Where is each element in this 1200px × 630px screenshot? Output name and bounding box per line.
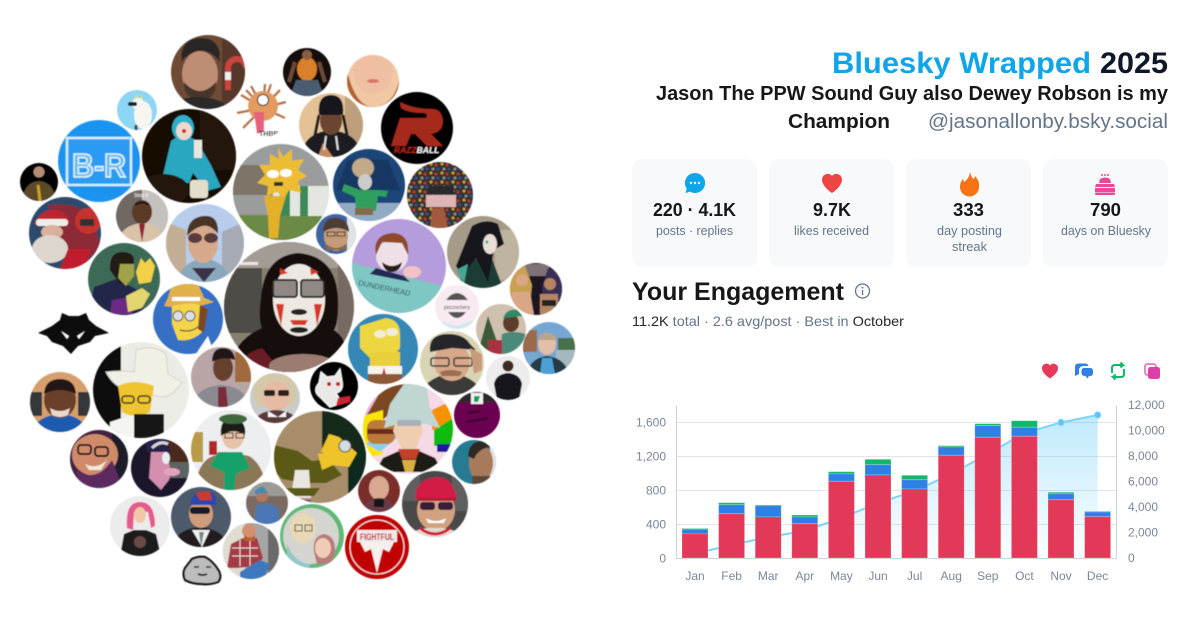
- avatar: Razzball logo: [381, 92, 453, 164]
- right axis labels: 2,000: [1128, 526, 1158, 540]
- avatar bubble cluster: [20, 35, 575, 584]
- month labels: Jan: [685, 569, 705, 583]
- avatar: B-R neon logo: B-R: [72, 147, 126, 184]
- icon: cake: [1095, 174, 1115, 195]
- avatar: yellow sun mascot: [233, 144, 329, 240]
- stat: day posting streak: [937, 200, 1002, 254]
- avatar: wrestler in orange: [283, 48, 331, 96]
- avatar: Gundam pride portrait: [363, 384, 453, 474]
- month labels: Oct: [1015, 569, 1034, 583]
- title: 2025: [1100, 47, 1168, 80]
- avatar: blonde woman with sunglasses: [250, 373, 300, 423]
- icon: heart: [822, 174, 842, 193]
- stacked bars: [682, 421, 1111, 558]
- right axis labels: [1128, 398, 1165, 565]
- bar: Oct: [1011, 421, 1037, 558]
- avatar: hat cartoon: [153, 284, 223, 354]
- bar: May: [828, 472, 854, 558]
- month labels: Mar: [758, 569, 779, 583]
- month labels: Sep: [977, 569, 999, 583]
- panel: days on Bluesky: [1043, 159, 1168, 267]
- avatar: man with blue wall: [452, 440, 496, 484]
- avatar: two wrestling women: [510, 263, 562, 315]
- avatar: man in black cap: [420, 331, 484, 395]
- icon: black wolf logo: [38, 313, 109, 354]
- heading: your engagement: Your Engagement: [632, 278, 845, 306]
- right axis labels: 6,000: [1128, 474, 1158, 488]
- bar: Apr: [792, 515, 818, 558]
- legend icons: [1042, 362, 1160, 380]
- avatar: pezzochery logo: pezzochery: [444, 305, 470, 311]
- avatar: wrestling mask main portrait: [224, 242, 354, 378]
- bar: Jan: [682, 528, 708, 558]
- display name and handle: Jason The PPW Sound Guy also Dewey Robson is my: [656, 83, 1169, 105]
- title: Bluesky Wrapped: [832, 47, 1091, 80]
- avatar: red-haired woman small: [358, 470, 400, 512]
- engagement summary: 11.2K total · 2.6 avg/post · Best in October: [632, 313, 904, 329]
- avatar: smiling man in blue: [30, 372, 90, 432]
- stat: likes received: 9.7K: [813, 200, 851, 220]
- avatar: B-R neon logo: [58, 120, 140, 202]
- display name and handle: @jasonallonby.bsky.social: [928, 111, 1168, 133]
- left axis labels: 1,200: [636, 450, 666, 464]
- avatar: Dunderhead cartoon: [352, 219, 446, 313]
- icon: legend heart: [1042, 364, 1058, 378]
- panel: posting streak: [906, 159, 1031, 267]
- icon: chat bubble: [685, 173, 705, 193]
- chart: monthly engagement: [636, 398, 1165, 583]
- avatar: black cat sticker: [310, 362, 358, 410]
- avatar: black shirt on white: [486, 356, 530, 400]
- icon: legend replies: [1075, 364, 1093, 378]
- stat: days on Bluesky: days on Bluesky: [1061, 223, 1151, 238]
- avatar: man in black beanie: [299, 93, 363, 157]
- avatar: red-haired woman: [347, 46, 399, 107]
- month labels: Aug: [941, 569, 962, 583]
- avatar: Fightful logo: FIGHTFUL: [360, 532, 394, 543]
- right axis labels: 0: [1128, 551, 1135, 565]
- avatar: wrestling crowd: [407, 162, 473, 228]
- avatar: yellow puppet in cowboy hat: [93, 342, 189, 438]
- avatar: Dunderhead cartoon: DUNDERHEAD: [358, 278, 412, 298]
- bar: Nov: [1048, 492, 1074, 558]
- avatar: man in camo: [20, 163, 58, 201]
- stat: likes received: likes received: [794, 223, 869, 238]
- avatar: man in beige suit: [116, 190, 168, 242]
- avatar: illustrated couple: [280, 504, 344, 570]
- month labels: Jul: [907, 569, 922, 583]
- avatar: monocle cartoon: [274, 411, 366, 506]
- avatar: alien in green sweater: [333, 149, 405, 221]
- month labels: Feb: [721, 569, 742, 583]
- bar: Jul: [902, 475, 928, 558]
- avatar: small man with glasses: [316, 214, 356, 254]
- avatar: man at waterside: [523, 322, 575, 374]
- stat: days on Bluesky: 790: [1090, 200, 1121, 220]
- bar: Sep: [975, 424, 1001, 558]
- avatar: cartoon tiger: THBBFT!: [259, 131, 289, 138]
- left axis labels: 1,600: [636, 416, 666, 430]
- left axis labels: 800: [646, 484, 666, 498]
- right axis labels: 4,000: [1128, 500, 1158, 514]
- panel: posts and replies: [632, 159, 757, 267]
- stat: posts and replies: [653, 200, 736, 238]
- icon: flame: [960, 172, 979, 196]
- avatar: Razzball logo: RAZZBALL: [394, 145, 439, 155]
- avatar: Fightful logo: [345, 515, 409, 579]
- month labels: [685, 569, 1108, 583]
- left axis labels: 400: [646, 518, 666, 532]
- avatar: man in red cap: [402, 471, 468, 537]
- icon: legend repost: [1112, 362, 1124, 380]
- avatar: pink-nosed cartoon: [131, 438, 189, 497]
- avatar: pink-haired girl: [110, 496, 170, 556]
- right axis labels: 10,000: [1128, 424, 1165, 438]
- icon: info: [856, 284, 870, 298]
- bar: Jun: [865, 459, 891, 558]
- stat: posts and replies: posts · replies: [656, 223, 733, 238]
- month labels: Dec: [1087, 569, 1108, 583]
- month labels: Apr: [795, 569, 814, 583]
- avatar: grey rock: [184, 557, 220, 584]
- avatar: cartoon tiger: [236, 83, 290, 138]
- avatar: Spongebob squidward meme: [348, 314, 418, 384]
- left axis labels: [636, 416, 666, 566]
- icon: legend quotes: [1145, 364, 1160, 379]
- avatar: cockatoo: [117, 90, 157, 133]
- avatar: man in beige suit: Stop it: [134, 193, 149, 199]
- avatar: man with Christmas tree: [476, 304, 526, 354]
- avatar: man in plaid suit: [191, 347, 251, 407]
- avatar: bearded man: [170, 34, 246, 110]
- display name and handle: Champion: [788, 111, 890, 133]
- bar: Mar: [755, 505, 781, 558]
- avatar: pezzochery logo: [435, 285, 479, 330]
- right axis labels: 8,000: [1128, 449, 1158, 463]
- stat: days on Bluesky: [1061, 200, 1151, 238]
- avatar: green-skinned villain: [88, 243, 160, 315]
- avatar: man in green scarf and tweed: [191, 410, 271, 490]
- avatar: man in blue and red cap: [171, 487, 231, 547]
- stat: posts and replies: 220 · 4.1K: [653, 200, 736, 220]
- cumulative area and line: [695, 412, 1101, 558]
- month labels: May: [830, 569, 853, 583]
- panel: likes: [769, 159, 894, 267]
- stat: likes received: [794, 200, 869, 238]
- avatar: anime girl: [447, 216, 519, 288]
- avatar: man in plaid shirt: [223, 523, 279, 579]
- stat: day posting streak: 333: [953, 200, 984, 220]
- left axis labels: 0: [659, 552, 666, 566]
- month labels: Jun: [868, 569, 888, 583]
- chart axes: [676, 405, 1117, 558]
- right axis labels: 12,000: [1128, 398, 1165, 412]
- avatar: purple cartoon: [454, 392, 500, 438]
- avatar: smiling bearded man with glasses: [70, 430, 128, 490]
- bar: Dec: [1085, 511, 1111, 558]
- stat: day posting streak: streak: [952, 239, 987, 254]
- stat: day posting streak: day posting: [937, 223, 1002, 238]
- avatar: small man in blue shirt: [246, 482, 288, 524]
- avatar: man in sunglasses: [166, 204, 244, 282]
- avatar: Santa and red helmet: [29, 197, 102, 269]
- month labels: Nov: [1050, 569, 1072, 583]
- bar: Feb: [719, 503, 745, 558]
- bar: Aug: [938, 446, 964, 558]
- avatar: teal clown: [137, 109, 236, 206]
- display name and handle: [656, 83, 1169, 133]
